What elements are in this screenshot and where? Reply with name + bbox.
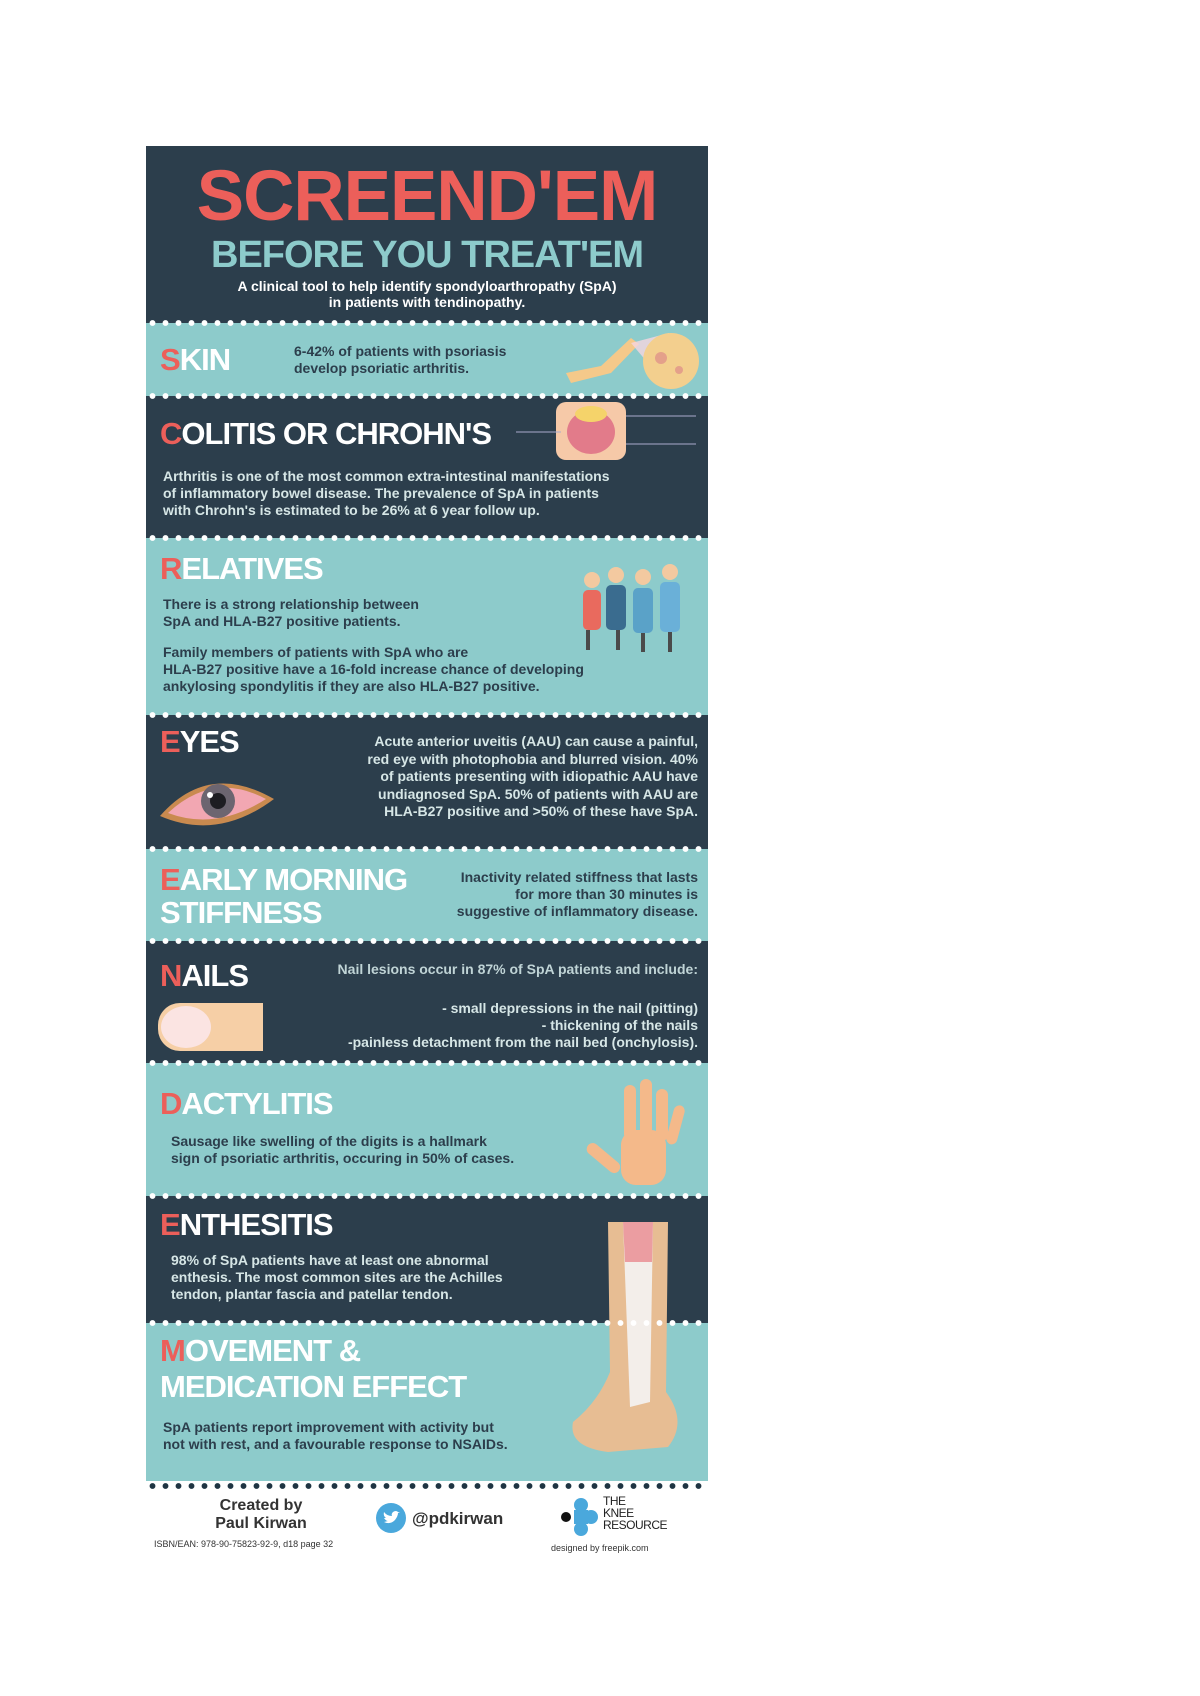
heading: early morning: STIFFNESS xyxy=(160,895,322,930)
text: skin xyxy=(294,343,506,376)
panel: early morning stiffness xyxy=(146,849,708,941)
text: movement: not with rest, and a favourable response to NSAIDs. xyxy=(163,1436,508,1452)
panel: dactylitis xyxy=(146,1063,708,1196)
heading: early morning xyxy=(160,862,407,930)
footer xyxy=(154,1494,667,1553)
icon: red eye xyxy=(160,784,274,826)
logo: the knee resource: KNEE xyxy=(603,1506,634,1520)
title: SCREEND'EM xyxy=(197,157,657,236)
panel: eyes xyxy=(146,715,708,849)
subtitle: BEFORE YOU TREAT'EM xyxy=(211,234,643,276)
heading: movement xyxy=(160,1333,467,1404)
panel: nails: - small depressions in the nail (pitting) xyxy=(442,1000,698,1016)
text: colitis xyxy=(163,468,610,518)
text: relatives: There is a strong relationship between xyxy=(163,596,419,612)
panel: nails xyxy=(146,941,708,1063)
panel: colitis xyxy=(146,396,708,538)
text: eyes: HLA-B27 positive and >50% of these have SpA. xyxy=(384,803,698,819)
icon: hand xyxy=(586,1079,685,1185)
credit: Created by xyxy=(220,1497,302,1514)
credit: Paul Kirwan xyxy=(215,1515,307,1532)
description: A clinical tool to help identify spondyloarthropathy (SpA) xyxy=(237,278,617,294)
text: nails: Nail lesions occur in 87% of SpA patients and include: xyxy=(338,961,698,977)
text: skin: 6-42% of patients with psoriasis xyxy=(294,343,506,359)
logo: the knee resource: THE xyxy=(603,1494,626,1508)
heading: dactylitis: DACTYLITIS xyxy=(160,1086,333,1121)
panel: relatives: Family members of patients with SpA who are xyxy=(163,644,468,660)
heading: movement: MOVEMENT & xyxy=(160,1333,360,1368)
text: stiffness: suggestive of inflammatory disease. xyxy=(457,903,698,919)
text: enthesitis: tendon, plantar fascia and patellar tendon. xyxy=(171,1286,453,1302)
panel: relatives: ankylosing spondylitis if they are also HLA-B27 positive. xyxy=(163,678,540,694)
text: enthesitis xyxy=(171,1252,503,1302)
heading: early morning: EARLY MORNING xyxy=(160,862,407,897)
twitter handle: @pdkirwan xyxy=(412,1509,503,1528)
logo: the knee resource xyxy=(561,1494,667,1536)
icon: intestines xyxy=(516,402,696,460)
heading: relatives: RELATIVES xyxy=(160,551,323,586)
panel: relatives xyxy=(146,538,708,715)
text: dactylitis: sign of psoriatic arthritis, occuring in 50% of cases. xyxy=(171,1150,514,1166)
credit xyxy=(215,1497,307,1532)
text: eyes xyxy=(367,733,698,819)
description xyxy=(237,278,617,310)
text: relatives: SpA and HLA-B27 positive patients. xyxy=(163,613,401,629)
icon: ankle and achilles tendon xyxy=(572,1222,678,1452)
text: eyes: Acute anterior uveitis (AAU) can cause a painful, xyxy=(374,733,698,749)
text: stiffness: for more than 30 minutes is xyxy=(515,886,698,902)
description: in patients with tendinopathy. xyxy=(329,294,525,310)
text: stiffness xyxy=(457,869,698,919)
heading: colitis: COLITIS OR CHROHN'S xyxy=(160,416,491,451)
text: skin: develop psoriatic arthritis. xyxy=(294,360,469,376)
text: movement: SpA patients report improvement with activity but xyxy=(163,1419,494,1435)
text: relatives xyxy=(163,596,419,629)
panel: skin xyxy=(146,323,708,396)
panel: nails: -painless detachment from the nail bed (onchylosis). xyxy=(348,1034,698,1050)
text: movement xyxy=(163,1419,508,1452)
heading: enthesitis: ENTHESITIS xyxy=(160,1207,333,1242)
text: colitis: Arthritis is one of the most common extra-intestinal manifestations xyxy=(163,468,610,484)
isbn: ISBN/EAN: 978-90-75823-92-9, d18 page 32 xyxy=(154,1539,333,1549)
text: eyes: red eye with photophobia and blurred vision. 40% xyxy=(367,750,698,766)
separators xyxy=(146,318,708,328)
heading: nails: NAILS xyxy=(160,958,248,993)
text: colitis: of inflammatory bowel disease. The prevalence of SpA in patients xyxy=(163,485,599,501)
icon: family xyxy=(583,564,680,652)
text: stiffness: Inactivity related stiffness that lasts xyxy=(461,869,698,885)
text: dactylitis: Sausage like swelling of the digits is a hallmark xyxy=(171,1133,487,1149)
heading: eyes: EYES xyxy=(160,724,239,759)
text: colitis: with Chrohn's is estimated to be 26% at 6 year follow up. xyxy=(163,502,540,518)
text: enthesitis: 98% of SpA patients have at least one abnormal xyxy=(171,1252,489,1268)
heading: skin: SKIN xyxy=(160,342,230,377)
text: dactylitis xyxy=(171,1133,514,1166)
twitter handle xyxy=(376,1503,503,1533)
panel: nails: - thickening of the nails xyxy=(542,1017,698,1033)
text: eyes: of patients presenting with idiopathic AAU have xyxy=(380,768,698,784)
panel: relatives: HLA-B27 positive have a 16-fold increase chance of developing xyxy=(163,661,584,677)
designed by: designed by freepik.com xyxy=(551,1543,649,1553)
panel: enthesitis xyxy=(146,1196,708,1323)
panel: movement & medication xyxy=(146,1323,708,1485)
heading: movement: MEDICATION EFFECT xyxy=(160,1369,466,1404)
logo: the knee resource: RESOURCE xyxy=(603,1518,667,1532)
text: eyes: undiagnosed SpA. 50% of patients with AAU are xyxy=(378,786,698,802)
icon: arm with skin lesion xyxy=(566,333,699,389)
icon: finger nail xyxy=(158,1003,263,1051)
text: enthesitis: enthesis. The most common sites are the Achilles xyxy=(171,1269,503,1285)
header panel xyxy=(146,146,708,323)
